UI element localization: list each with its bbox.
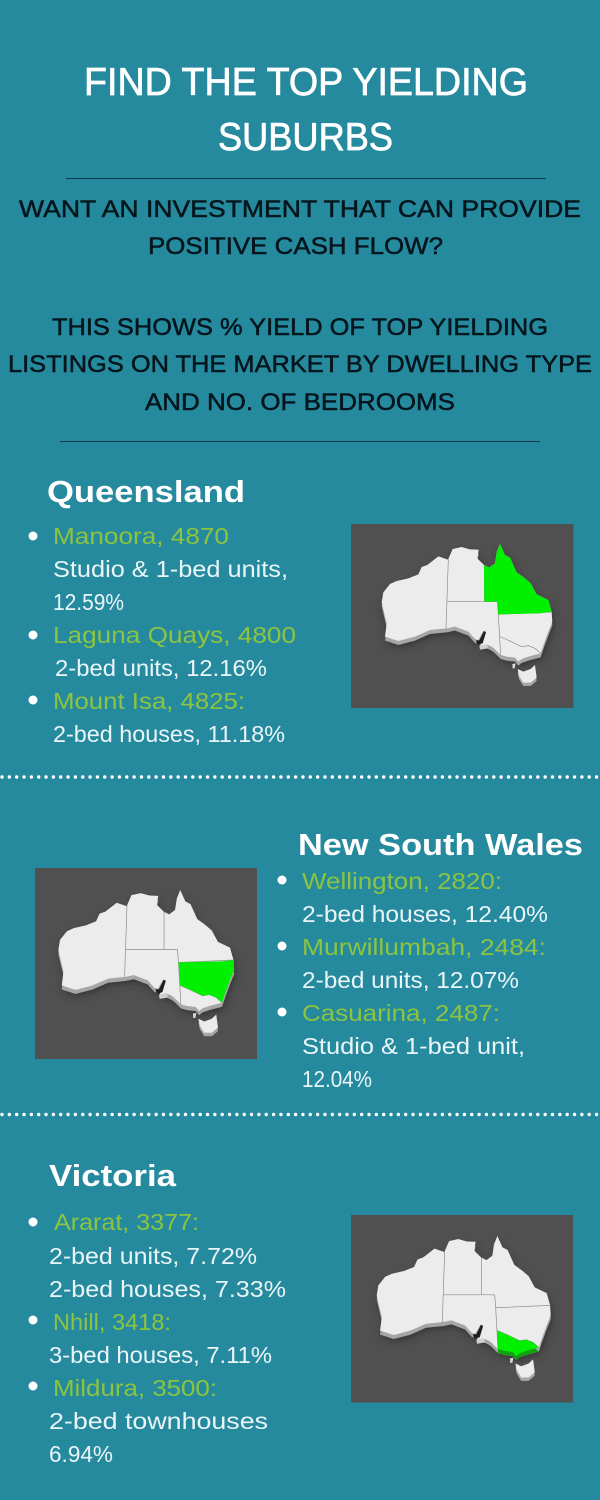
title: SUBURBS — [218, 116, 393, 159]
list: Victoria suburbs: 2-bed units, 7.72% — [49, 1243, 257, 1269]
panel: Queensland — [28, 474, 574, 747]
list: New South Wales suburbs: Murwillumbah, 2484: — [302, 934, 546, 960]
list: Victoria suburbs: 3-bed houses, 7.11% — [49, 1342, 272, 1368]
list: New South Wales suburbs: 2-bed units, 12.07% — [302, 967, 519, 993]
map: Queensland highlighted — [351, 524, 574, 708]
list: New South Wales suburbs: 2-bed houses, 12.40% — [302, 901, 548, 927]
list: Victoria suburbs: Mildura, 3500: — [53, 1375, 217, 1401]
list: Queensland suburbs: Laguna Quays, 4800 — [53, 622, 296, 648]
list: Queensland suburbs: 2-bed houses, 11.18% — [53, 721, 285, 747]
list: Victoria suburbs — [28, 1209, 286, 1467]
intro description — [8, 314, 592, 416]
list: Victoria suburbs: 2-bed houses, 7.33% — [49, 1276, 286, 1302]
divider: dotted — [2, 1113, 600, 1116]
list: New South Wales suburbs: Wellington, 2820: — [302, 868, 502, 894]
intro description: AND NO. OF BEDROOMS — [145, 389, 455, 416]
list: Queensland suburbs — [28, 523, 296, 747]
panel: New South Wales — [35, 827, 583, 1092]
list: Queensland suburbs: Studio & 1-bed units, — [53, 556, 288, 582]
intro question — [19, 196, 581, 260]
heading: Queensland: Queensland — [47, 474, 245, 509]
list: Victoria suburbs: Nhill, 3418: — [53, 1309, 171, 1335]
intro description: LISTINGS ON THE MARKET BY DWELLING TYPE — [8, 351, 592, 378]
intro question: WANT AN INVESTMENT THAT CAN PROVIDE — [19, 196, 581, 223]
title: FIND THE TOP YIELDING — [84, 61, 528, 104]
list: New South Wales suburbs — [278, 868, 548, 1092]
list: Queensland suburbs: 12.59% — [53, 589, 124, 615]
intro description: THIS SHOWS % YIELD OF TOP YIELDING — [52, 314, 548, 341]
title — [84, 61, 528, 159]
list: Queensland suburbs: Mount Isa, 4825: — [53, 688, 245, 714]
heading: New South Wales: New South Wales — [298, 827, 583, 862]
list: Queensland suburbs: 2-bed units, 12.16% — [55, 655, 267, 681]
list: Victoria suburbs: Ararat, 3377: — [54, 1209, 199, 1235]
list: New South Wales suburbs: 12.04% — [302, 1066, 372, 1092]
list: Queensland suburbs: Manoora, 4870 — [53, 523, 229, 549]
list: New South Wales suburbs: Casuarina, 2487: — [302, 1000, 500, 1026]
heading: Victoria: Victoria — [49, 1158, 177, 1193]
map: New South Wales highlighted — [35, 868, 257, 1059]
list: Victoria suburbs: 6.94% — [49, 1441, 113, 1467]
list: New South Wales suburbs: Studio & 1-bed unit, — [302, 1033, 525, 1059]
divider: dotted — [2, 775, 600, 779]
intro question: POSITIVE CASH FLOW? — [148, 233, 443, 260]
map: Victoria highlighted — [351, 1215, 573, 1402]
list: Victoria suburbs: 2-bed townhouses — [49, 1408, 268, 1434]
panel: Victoria — [28, 1158, 573, 1467]
